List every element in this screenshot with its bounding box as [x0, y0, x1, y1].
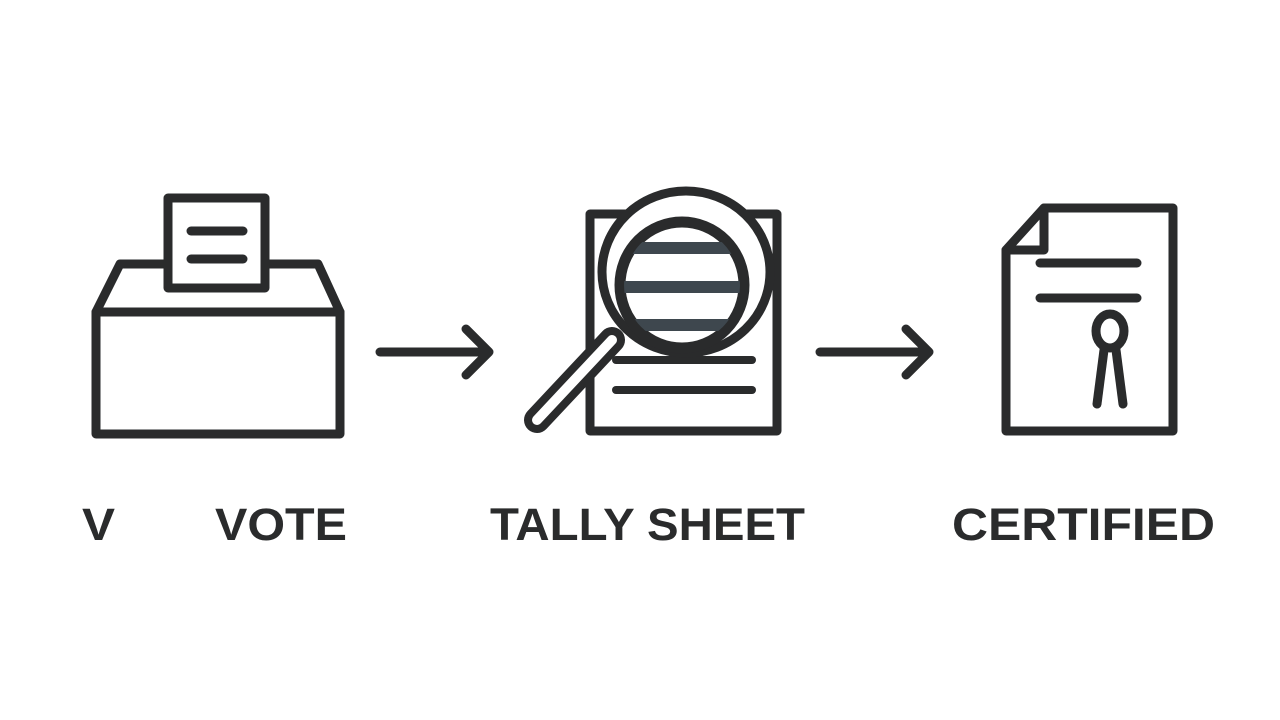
- label: TALLY SHEET: TALLY SHEET: [490, 499, 805, 550]
- icon: tally sheet with magnifier: [537, 191, 777, 431]
- arrow 1: [380, 329, 489, 375]
- icon: certified document: [1006, 208, 1173, 431]
- icon: ballot box: [96, 198, 340, 434]
- label: VOTE: VOTE: [215, 499, 347, 550]
- label: CERTIFIED: CERTIFIED: [952, 499, 1215, 550]
- arrow 2: [820, 329, 929, 375]
- label: V: V: [82, 499, 115, 550]
